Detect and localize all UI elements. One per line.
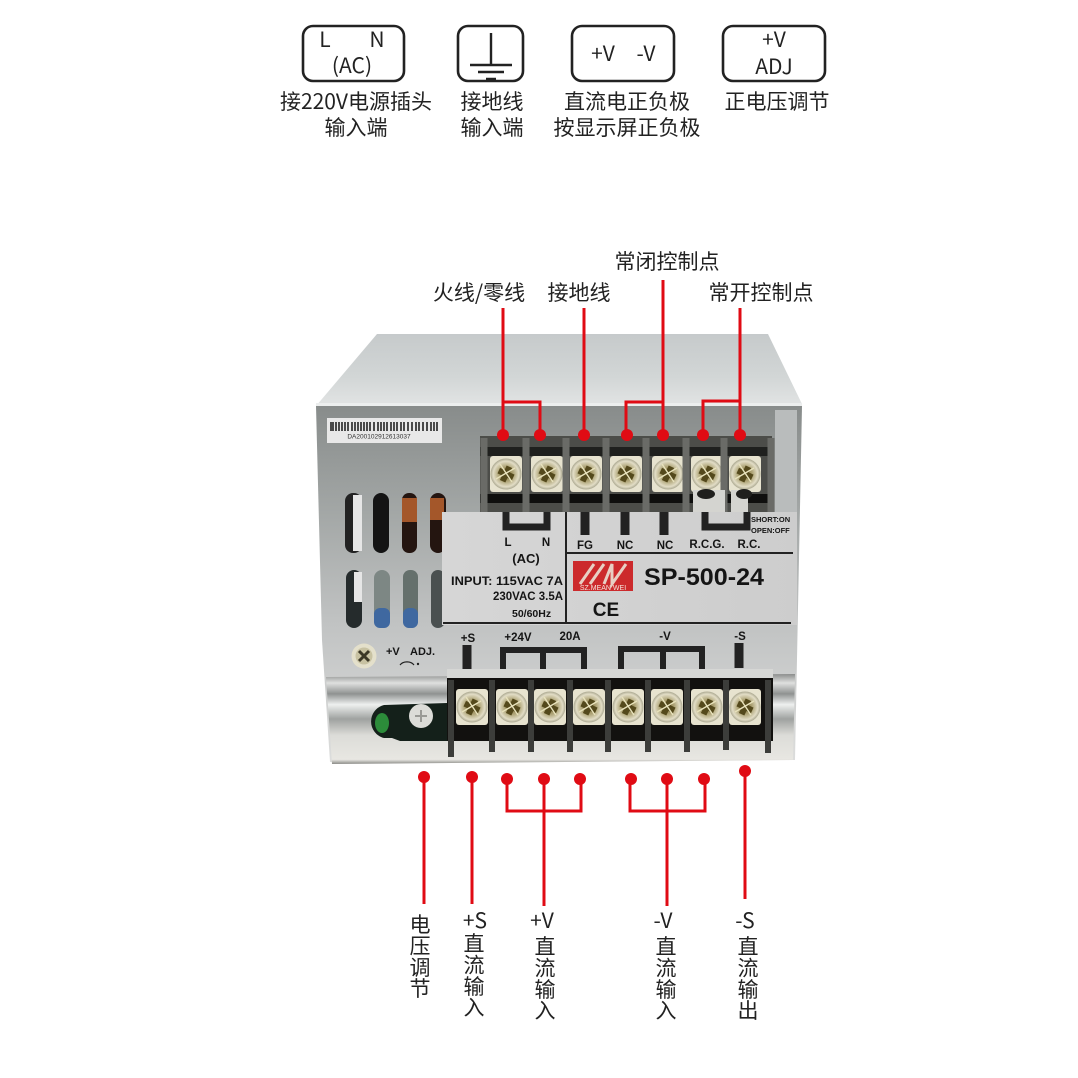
plate: terminal names: [504, 537, 760, 566]
legend: ground: [458, 26, 524, 142]
output labels above bottom terminals: +S: [461, 633, 476, 645]
barcode sticker: DA2001029126​13037: [347, 434, 411, 440]
bottom callout: +S: +S: [463, 905, 487, 935]
top callout: live and neutral: 火线/零线: [433, 277, 525, 307]
plate: terminal names: (AC): [512, 551, 540, 566]
plate: input ratings: 50/60Hz: [512, 608, 551, 620]
bottom callout: +V: 流: [534, 952, 556, 982]
bottom callout: -S: -S: [735, 905, 755, 935]
legend: DC positive and negative: +V: [591, 38, 616, 68]
barcode sticker: [327, 418, 442, 443]
plate: input ratings: [451, 576, 563, 620]
plate: terminal names: L: [504, 537, 512, 549]
top face of case: [316, 334, 802, 406]
lower metal cover: [326, 674, 795, 764]
plate: model number: SP-500-24: [644, 564, 764, 591]
legend: ground: 接地线: [460, 86, 524, 116]
legend: ground: 输入端: [460, 112, 524, 142]
legend: DC positive and negative: [554, 26, 700, 142]
legend: AC input: 输入端: [324, 112, 388, 142]
plate: brand logo: [573, 561, 633, 592]
bottom callout: voltage adjust: 压: [410, 930, 430, 960]
bottom callout: -S: [735, 765, 758, 1025]
output labels above bottom terminals: -V: [659, 631, 671, 643]
legend: AC input: 接220V电源插头: [280, 86, 432, 116]
plate: terminal names: N: [542, 537, 550, 549]
bottom callout: voltage adjust: [410, 771, 430, 1003]
legend: AC input: (AC): [332, 50, 372, 80]
plate: wiring brackets: [506, 512, 747, 527]
plate: terminal names: NC: [617, 540, 633, 552]
bottom callout: -V: 直: [656, 931, 676, 961]
plate: terminal names: FG: [577, 540, 593, 552]
legend: positive voltage adjust: ADJ: [755, 51, 793, 81]
bottom callout: -S: 直: [738, 931, 758, 961]
top callout: live and neutral: [433, 277, 546, 441]
legend: AC input: [280, 24, 432, 142]
legend: positive voltage adjust: +V: [762, 24, 787, 54]
plate: terminal names: NC: [657, 540, 673, 552]
specification plate: [442, 512, 797, 625]
legend: AC input: N: [369, 24, 385, 54]
top callout: ground: [548, 277, 610, 441]
plate: short/open note: SHORT:ON: [751, 515, 790, 524]
top callout: normally closed: [614, 246, 720, 441]
bottom callout: +S: 入: [464, 992, 484, 1022]
bottom callout: -S: 输: [738, 974, 758, 1004]
bottom callout: -S: 出: [738, 995, 758, 1025]
plate: CE mark: CE: [593, 600, 619, 621]
bottom callout: -V: -V: [654, 905, 673, 935]
bottom callout: +S: 流: [464, 950, 484, 980]
power supply unit photo: [316, 334, 802, 764]
bottom callout: +S: 输: [464, 971, 484, 1001]
plate: terminal names: R.C.: [738, 539, 760, 551]
bottom callout: +V: +V: [530, 905, 555, 935]
voltage adjust screw and label: +V: [386, 646, 400, 658]
front face of case: [316, 406, 802, 762]
legend: AC input: L: [319, 24, 331, 54]
legend: positive voltage adjust: [723, 24, 830, 116]
bottom callout: +V: 入: [534, 995, 556, 1025]
bottom callout: voltage adjust: 节: [410, 973, 430, 1003]
status LED and trim pot: [371, 703, 447, 741]
plate: terminal names: R.C.G.: [689, 539, 725, 551]
bottom callout: -V: 入: [656, 995, 676, 1025]
bottom callout: +V: 输: [534, 974, 556, 1004]
output labels above bottom terminals: [461, 631, 746, 670]
plate: short/open note: OPEN:OFF: [751, 526, 790, 535]
legend: DC positive and negative: 按显示屏正负极: [554, 112, 700, 142]
plate: short/open note: [751, 515, 790, 535]
bottom callout: -V: 输: [656, 974, 676, 1004]
bottom terminal block: [447, 669, 773, 757]
output labels above bottom terminals: +24V: [504, 632, 532, 644]
bottom callout: +S: 直: [464, 928, 484, 958]
bottom callout: -S: 流: [738, 952, 758, 982]
voltage adjust screw and label: [352, 644, 435, 668]
legend: terminal symbols: [280, 24, 830, 142]
plate: brand logo: SZ.MEAN WEI: [580, 585, 626, 592]
bottom callout: +V: 直: [534, 931, 556, 961]
legend: DC positive and negative: -V: [637, 38, 656, 68]
bottom callout: -V: 流: [656, 952, 676, 982]
legend: DC positive and negative: 直流电正负极: [564, 86, 690, 116]
bottom callout: voltage adjust: 调: [410, 952, 430, 982]
top callout: ground: 接地线: [548, 277, 610, 307]
legend: positive voltage adjust: 正电压调节: [724, 86, 830, 116]
bottom callout: +S: [463, 771, 487, 1022]
ventilation slots: [345, 493, 446, 628]
top callout: normally closed: 常闭控制点: [614, 246, 720, 276]
bottom callout: -V: [625, 773, 710, 1025]
bottom callout: +V: [501, 773, 586, 1025]
voltage adjust screw and label: ADJ.: [410, 646, 435, 658]
output labels above bottom terminals: 20A: [559, 631, 581, 643]
plate: input ratings: INPUT: 115VAC 7A: [451, 576, 563, 588]
bottom callout: voltage adjust: 电: [410, 909, 430, 939]
plate: input ratings: 230VAC 3.5A: [493, 591, 563, 603]
top terminal block: [480, 436, 772, 512]
top callout: normally open: 常开控制点: [708, 277, 814, 307]
output labels above bottom terminals: -S: [734, 631, 746, 643]
top callout: normally open: [697, 277, 814, 441]
